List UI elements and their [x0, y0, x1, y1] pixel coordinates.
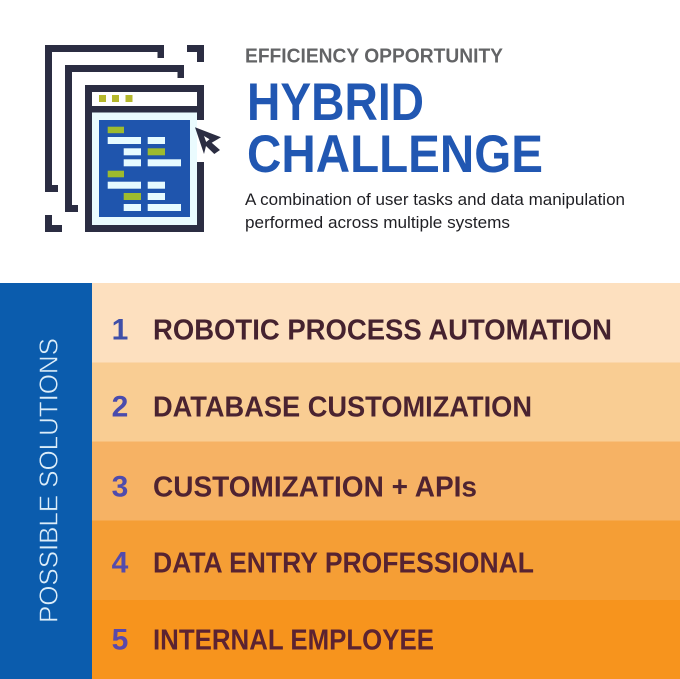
- solution 3 row: CUSTOMIZATION + APIs: [153, 472, 477, 504]
- solution 2 row: [92, 362, 680, 442]
- title: HYBRID: [247, 73, 424, 132]
- icon: back window frame: [45, 45, 204, 232]
- solution 1 row: 1: [112, 314, 128, 346]
- icon: middle window frame: [65, 65, 184, 212]
- solution 5 row: 5: [112, 623, 128, 656]
- solution 5 row: [92, 600, 680, 679]
- icon: stacked application windows with cursor: [45, 45, 221, 232]
- description text: performed across multiple systems: [245, 213, 510, 232]
- solution 1 row: [92, 283, 680, 363]
- description text: [245, 190, 625, 232]
- solution 2 row: 2: [112, 391, 128, 424]
- description text: A combination of user tasks and data manipulation: [245, 190, 625, 209]
- icon: front window frame: [85, 85, 204, 232]
- solution 4 row: [92, 520, 680, 600]
- sidebar label: POSSIBLE SOLUTIONS: [34, 338, 64, 623]
- title: [247, 73, 543, 184]
- icon: code panel: [99, 120, 190, 217]
- solution 3 row: 3: [112, 471, 128, 504]
- solution 4 row: 4: [112, 547, 129, 580]
- panel: possible solutions sidebar: [0, 283, 92, 679]
- solution 4 row: DATA ENTRY PROFESSIONAL: [153, 548, 534, 580]
- icon: mouse cursor arrow: [195, 127, 221, 154]
- solution 5 row: INTERNAL EMPLOYEE: [153, 624, 434, 656]
- solution 2 row: DATABASE CUSTOMIZATION: [153, 392, 532, 424]
- eyebrow heading: EFFICIENCY OPPORTUNITY: [245, 46, 504, 68]
- solution 1 row: ROBOTIC PROCESS AUTOMATION: [153, 314, 612, 346]
- title: CHALLENGE: [247, 125, 543, 184]
- icon: window title bar dots: [99, 95, 132, 102]
- solution 3 row: [92, 442, 680, 522]
